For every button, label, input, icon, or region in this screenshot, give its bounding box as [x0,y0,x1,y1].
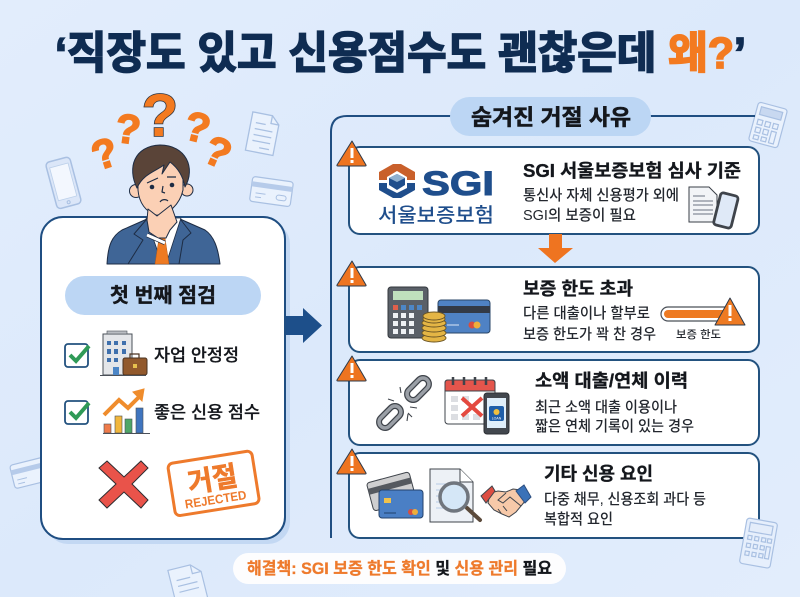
callout: solution: 해결책: SGI 보증 한도 확인 및 신용 관리 필요 [247,559,552,578]
icon: warning 4 [337,449,366,474]
card: small loan and overdue history: 최근 소액 대출 이용이나 [535,399,677,416]
icon: faint document top [245,112,280,155]
check heading pill: 첫 번째 점검 [110,284,216,307]
stamp: rejected: REJECTED [184,488,247,512]
icon: faint phone [45,156,82,209]
card: guarantee limit exceeded: 보증 한도가 꽉 찬 경우 [523,326,656,343]
icon: broken chain [377,376,431,430]
card: other credit factors: 기타 신용 요인 [544,464,653,484]
icon: worried businessman [107,145,220,264]
card: small loan and overdue history: 소액 대출/연체 이력 [535,371,688,391]
panel: hidden reasons frame [331,116,755,538]
card: other credit factors: 복합적 요인 [544,511,613,528]
arrow: SGI to limit [538,234,573,263]
check heading pill [65,276,261,315]
card: small loan and overdue history [349,360,759,445]
icon: calendar and phone [445,377,509,434]
icon: question marks: ? [197,126,238,178]
arrow: to hidden reasons [286,308,322,343]
card: guarantee limit exceeded: 보증 한도 초과 [523,279,633,299]
icon: faint calculator top [748,102,788,148]
card: SGI criteria: 통신사 자체 신용평가 외에 [523,187,679,204]
check item: good credit score: 좋은 신용 점수 [154,403,260,422]
icon: question marks: ? [142,82,178,149]
check item: stable job [65,331,239,376]
heading pill: hidden reasons [450,97,651,136]
icon: document and phone [689,187,739,229]
card: other credit factors: 다중 채무, 신용조회 과다 등 [544,491,706,508]
panel: first check [41,145,290,544]
icon: question marks: ? [180,102,215,153]
card: small loan and overdue history: 짧은 연체 기록이 있는 경우 [535,418,694,435]
icon: faint credit card [249,176,293,207]
icon: handshake [481,485,531,517]
SGI logo: 서울보증보험 [378,204,494,227]
icon: warning 2 [337,261,366,286]
icon: faint document bottom [168,563,208,597]
gauge: guarantee limit: 보증 한도 [676,328,721,341]
icon: question marks: ? [86,128,124,179]
card: other credit factors [349,453,759,538]
SGI logo: SGI [422,165,494,203]
callout: solution [233,553,566,584]
card: guarantee limit exceeded [349,267,759,352]
check item: stable job: 자업 안정정 [154,346,239,365]
icon: faint calculator bottom [739,518,778,568]
icon: question marks [86,82,238,179]
stamp: rejected: 거절 [185,460,240,499]
card: guarantee limit exceeded: 다른 대출이나 할부로 [523,305,650,322]
card: SGI criteria: SGI 서울보증보험 심사 기준 [523,161,741,181]
icon: warning 1 [337,141,366,166]
icon: warning 3 [337,356,366,381]
icon: calculator card coins [388,287,490,342]
icon: credit cards [366,472,423,518]
icon: faint card left [9,457,48,489]
heading pill: hidden reasons: 숨겨진 거절 사유 [471,105,631,130]
stamp: rejected [167,451,260,516]
title: ‘직장도 있고 신용점수도 괜찮은데 왜?’ [55,29,746,78]
icon: calendar and phone: LOAN [492,416,502,420]
card: SGI criteria: SGI의 보증이 필요 [523,207,636,224]
check item: good credit score [65,389,260,434]
icon: question marks: ? [112,105,144,154]
card: SGI criteria [349,147,759,234]
gauge: guarantee limit [661,298,745,341]
icon: red cross [99,461,148,508]
SGI logo [378,164,494,227]
icon: document magnifier [430,469,480,522]
